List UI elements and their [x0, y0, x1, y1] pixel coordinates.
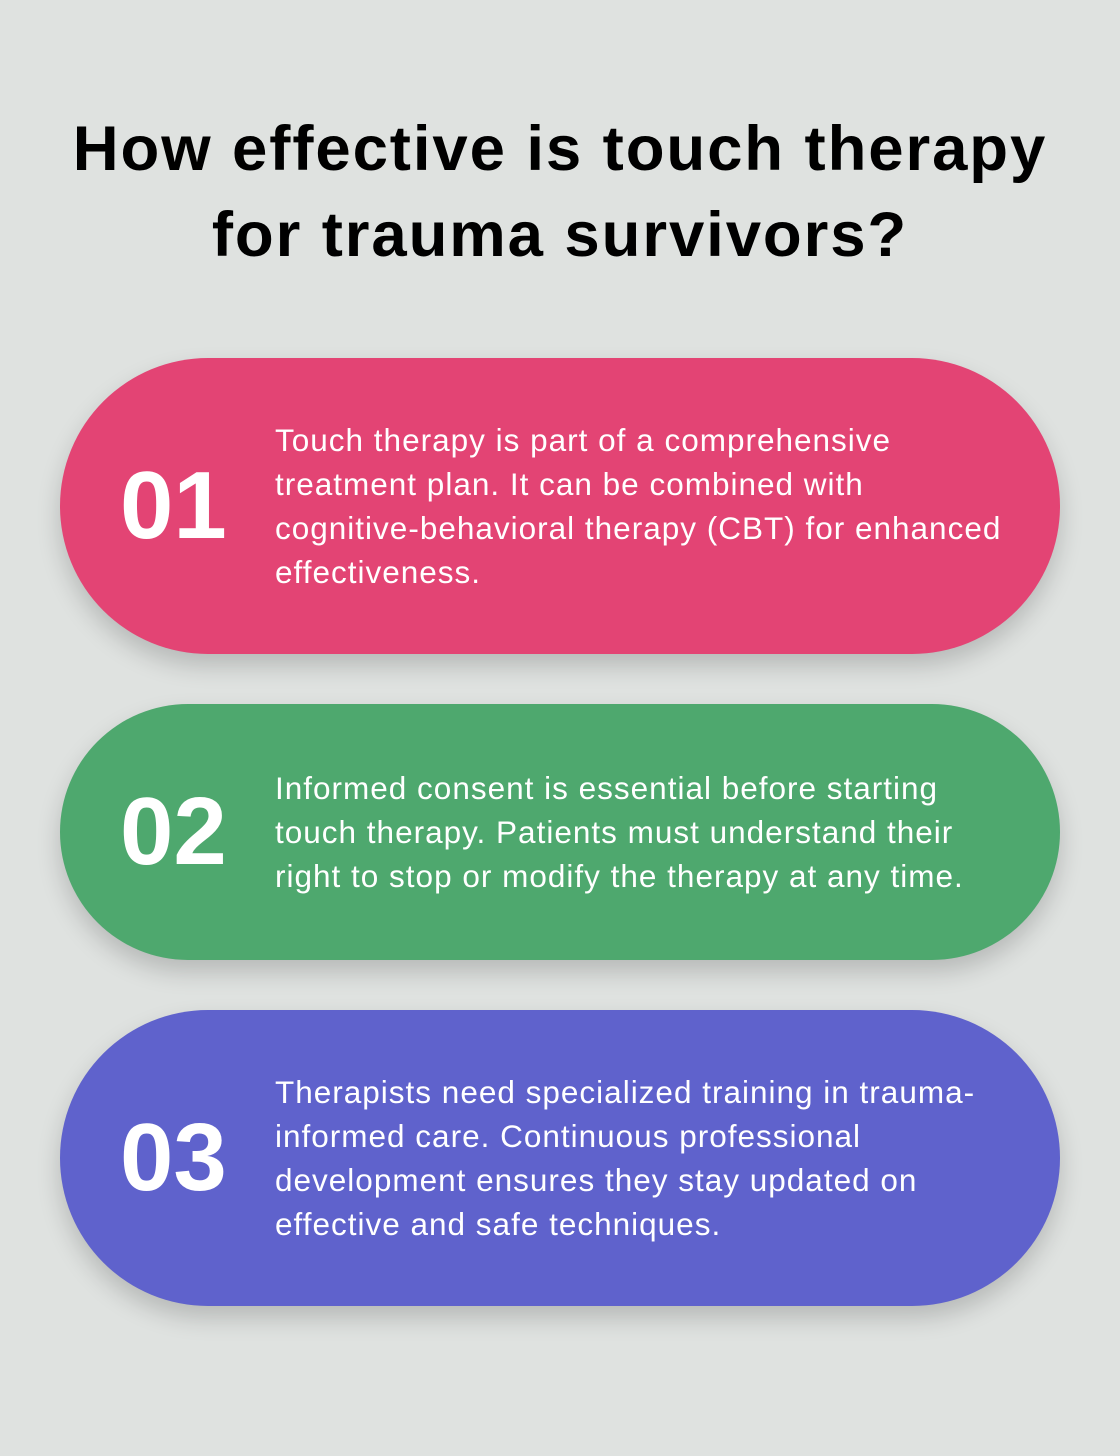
text 02 — [275, 770, 964, 894]
text 03: informed care. Continuous professional — [275, 1118, 861, 1154]
number 02: 02 — [120, 778, 227, 885]
text 01: Touch therapy is part of a comprehensive — [275, 422, 891, 458]
text 02: touch therapy. Patients must understand their — [275, 814, 953, 850]
title: for trauma survivors? — [212, 200, 908, 270]
text 01: cognitive-behavioral therapy (CBT) for enhanced — [275, 510, 1001, 546]
text 01: treatment plan. It can be combined with — [275, 466, 864, 502]
title — [73, 114, 1047, 270]
text 02: right to stop or modify the therapy at any time. — [275, 858, 964, 894]
panel: 02 — [60, 704, 1060, 960]
text 01 — [275, 422, 1001, 590]
panel: 03 — [60, 1010, 1060, 1306]
text 03: Therapists need specialized training in trauma- — [275, 1074, 975, 1110]
panel: 01 — [60, 358, 1060, 654]
text 03 — [275, 1074, 975, 1242]
text 03: effective and safe techniques. — [275, 1206, 721, 1242]
number 01: 01 — [120, 452, 227, 559]
text 03: development ensures they stay updated on — [275, 1162, 917, 1198]
text 01: effectiveness. — [275, 554, 481, 590]
number 03: 03 — [120, 1104, 227, 1211]
title: How effective is touch therapy — [73, 114, 1047, 184]
text 02: Informed consent is essential before starting — [275, 770, 938, 806]
